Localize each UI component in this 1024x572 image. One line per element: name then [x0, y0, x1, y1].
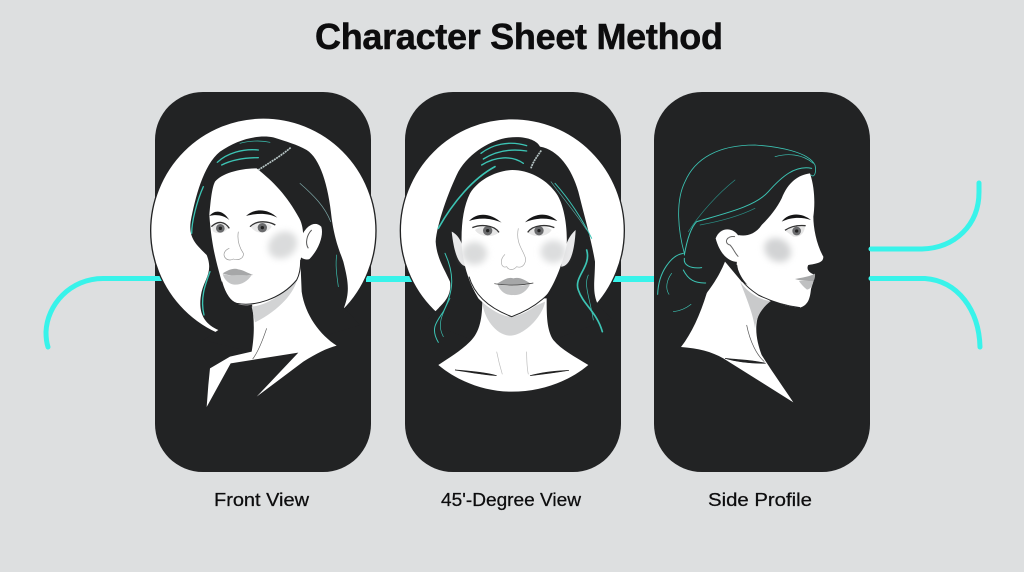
hair	[425, 137, 612, 355]
nose	[501, 228, 525, 270]
panel: 45-degree view card	[405, 92, 621, 472]
brows	[209, 212, 229, 220]
brows	[469, 215, 502, 223]
cheek shadow	[760, 233, 795, 267]
label: side profile: Side Profile	[708, 490, 812, 510]
ear	[300, 224, 322, 260]
panel: side profile card	[654, 92, 870, 472]
connector: cyan flow lines	[46, 183, 980, 347]
portrait: side profile	[658, 145, 823, 402]
jaw line	[737, 265, 800, 308]
collar line	[725, 358, 766, 363]
panel: front view card	[155, 92, 371, 472]
face	[462, 170, 567, 317]
cheek shadows	[462, 242, 487, 265]
lips	[223, 269, 253, 276]
eyes	[475, 226, 499, 236]
portrait: 45-degree view	[400, 119, 624, 392]
neck and shoulders	[438, 298, 588, 392]
hair part	[258, 148, 291, 170]
neck and shoulders	[681, 262, 793, 402]
neck and shoulders	[207, 252, 337, 407]
teal hair strands	[434, 143, 602, 342]
lips	[497, 278, 531, 285]
label: front view: Front View	[214, 490, 310, 510]
neck shadow	[740, 282, 771, 328]
hair part	[531, 150, 542, 168]
teal hair strands	[658, 145, 816, 312]
face	[737, 173, 823, 308]
jaw line	[222, 260, 301, 304]
teal hair strands	[192, 141, 338, 315]
nose	[224, 232, 243, 260]
ear	[716, 229, 740, 262]
lips	[795, 274, 815, 281]
collarbones	[455, 370, 497, 376]
eyes	[212, 223, 229, 233]
brow	[782, 214, 811, 222]
cheek shadow	[263, 226, 302, 264]
ears	[452, 232, 468, 267]
portrait: front view	[151, 118, 376, 407]
neck shadow	[252, 278, 297, 322]
face	[209, 168, 303, 305]
neck shadow	[482, 302, 545, 336]
eye	[786, 226, 805, 237]
hair	[190, 137, 360, 355]
title: Character Sheet Method	[315, 16, 723, 57]
label: 45-degree view: 45'-Degree View	[441, 490, 582, 510]
jaw line	[469, 277, 559, 317]
